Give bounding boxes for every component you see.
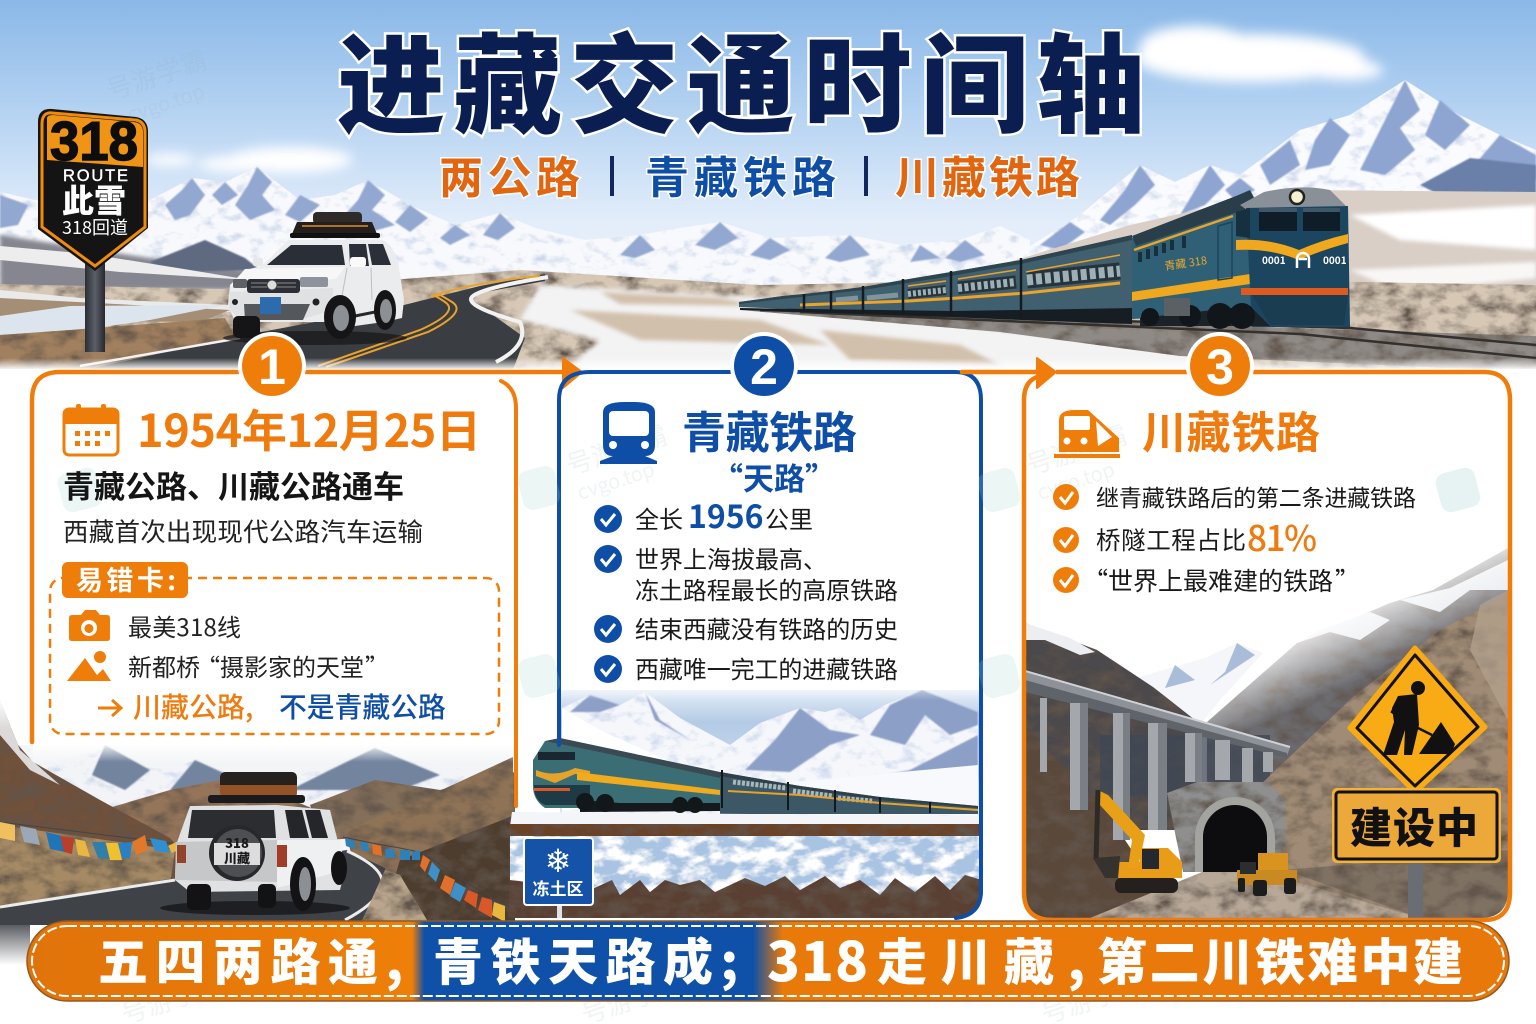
length fact: 公里 xyxy=(765,500,813,535)
bottom mnemonic banner xyxy=(27,918,1509,1001)
panel 2 content xyxy=(594,397,898,685)
callout tab xyxy=(62,562,188,598)
route label: ROUTE xyxy=(63,167,128,185)
subtitle part 3: 川藏铁路 xyxy=(895,142,1080,206)
banner phrase 4: 第二川铁难中建 xyxy=(1097,923,1463,995)
divider 1 xyxy=(610,156,614,196)
watermarks: 号游学霸 xyxy=(1021,415,1131,483)
scene: panel 3 construction xyxy=(1025,548,1508,922)
length fact: 1956 xyxy=(688,492,764,538)
check 1 xyxy=(1053,484,1079,510)
left mountain xyxy=(1025,623,1200,830)
right grey mountains xyxy=(1207,548,1508,790)
prayer flags left xyxy=(0,822,178,860)
callout tab text: 易错卡: xyxy=(76,559,176,598)
icon: train xyxy=(600,402,657,464)
right high snow range xyxy=(1000,80,1536,320)
permafrost sign xyxy=(524,836,593,920)
ballast and track xyxy=(740,310,1536,372)
tianlu label: “ xyxy=(712,454,743,499)
railway heading: 川藏铁路 xyxy=(1142,397,1320,461)
text: xinduqiao: 新都桥 xyxy=(128,648,200,683)
scene: panel 1 road xyxy=(0,698,515,925)
sign text: 冻土区 xyxy=(532,875,584,900)
train xyxy=(533,738,978,814)
white fade bottom left xyxy=(0,925,30,965)
road rear xyxy=(0,850,388,925)
railway heading: 青藏铁路 xyxy=(682,397,857,461)
spare tire sublabel: 川藏 xyxy=(224,848,250,867)
watermarks: cvgo.top xyxy=(1033,453,1118,506)
banner phrase 1: 五四两路通, xyxy=(98,923,403,995)
worker icon xyxy=(1383,681,1455,755)
check 2 xyxy=(594,545,622,573)
excavator xyxy=(1093,790,1182,893)
loco number plate right: 0001 xyxy=(1323,252,1347,267)
subtitle part 1: 两公路 xyxy=(439,142,580,206)
81 percent: 81% xyxy=(1247,511,1317,562)
panel 3 content xyxy=(1053,397,1416,598)
white fade into panels xyxy=(0,358,1536,370)
icon: calendar xyxy=(64,404,118,455)
divider 2 xyxy=(864,156,868,196)
check 3 xyxy=(594,615,622,643)
icon: camera xyxy=(69,610,110,641)
icon: bullet train xyxy=(1054,410,1120,458)
fade top of left strip xyxy=(0,700,10,724)
ground cross-section xyxy=(509,812,983,918)
loco side lettering: 青藏 318 xyxy=(1163,252,1208,274)
tunnel portal xyxy=(1167,782,1285,872)
passenger carriages xyxy=(739,235,1132,324)
check 2 xyxy=(1053,527,1079,553)
panel 2 white card xyxy=(557,372,981,918)
history fact: 结束西藏没有铁路的历史 xyxy=(635,610,898,645)
permafrost fact: 冻土路程最长的高原铁路 xyxy=(635,571,898,606)
bridge-tunnel fact: 桥隧工程占比 xyxy=(1096,522,1246,557)
callout: common mistake xyxy=(50,559,499,734)
loco emblem xyxy=(1297,253,1309,268)
step badge 3: 3 xyxy=(1206,339,1234,395)
banner phrase 2: 青铁天路成; xyxy=(433,923,738,995)
right tan slope xyxy=(1260,595,1508,918)
panel 2 border and arrow xyxy=(559,358,1056,918)
correction orange: 川藏公路, xyxy=(133,686,253,726)
check 1 xyxy=(594,505,622,533)
subtitle part 2: 青藏铁路 xyxy=(645,142,836,206)
hardest railway: ” xyxy=(1335,562,1360,598)
distant snowy peak xyxy=(1140,644,1262,721)
clouds xyxy=(145,26,1383,173)
hardest railway: “ xyxy=(1083,562,1108,598)
construction label: 建设中 xyxy=(1350,795,1478,856)
icon: mountains xyxy=(67,658,111,681)
white band above panels xyxy=(0,369,1536,375)
icon: location dot xyxy=(94,651,106,663)
altitude fact: 世界上海拔最高、 xyxy=(635,540,827,575)
tianlu label: ” xyxy=(805,454,836,499)
subtitle xyxy=(439,142,1080,206)
distant snow mountains xyxy=(38,753,464,851)
text: xinduqiao: “ xyxy=(196,648,220,683)
road xyxy=(75,274,548,372)
text: most beautiful 318: 最美318线 xyxy=(128,608,241,643)
check 3 xyxy=(1053,567,1079,593)
panel 3 white card xyxy=(1023,372,1510,920)
panel 1 content xyxy=(50,395,499,734)
step badge 1 xyxy=(238,332,306,400)
fade scene top xyxy=(561,690,979,698)
banner phrase 3 number: 318 xyxy=(767,918,868,997)
fade top of scene xyxy=(89,745,513,761)
scene: panel 2 frozen railway xyxy=(509,675,983,920)
step badge 1: 1 xyxy=(258,339,286,395)
bridge xyxy=(1025,671,1290,840)
rear SUV xyxy=(160,772,350,915)
hero SUV xyxy=(223,212,407,345)
watermarks: 号游学霸 xyxy=(561,415,671,483)
318 sub line: 318回道 xyxy=(62,214,128,240)
text: xinduqiao: ” xyxy=(365,648,389,683)
background: hero landscape xyxy=(0,0,1536,375)
loco number plate left: 0001 xyxy=(1262,252,1286,267)
road fade under left edge xyxy=(0,925,30,965)
second railway fact: 继青藏铁路后的第二条进藏铁路 xyxy=(1096,479,1416,513)
event heading: 青藏公路、川藏公路通车 xyxy=(63,462,404,507)
hardest railway: 世界上最难建的铁路 xyxy=(1108,562,1333,598)
watermarks: cvgo.top xyxy=(123,75,208,128)
left foreground slope xyxy=(1026,729,1151,918)
318 number: 318 xyxy=(50,110,138,172)
check 4 xyxy=(594,655,622,683)
panel 1 white card xyxy=(30,372,517,920)
panel 3 border xyxy=(1024,372,1510,920)
only completed fact: 西藏唯一完工的进藏铁路 xyxy=(635,650,898,685)
length fact: 全长 xyxy=(635,500,683,535)
plain and snowy ground xyxy=(0,270,1536,375)
step badge 2 xyxy=(730,332,798,400)
event description: 西藏首次出现现代公路汽车运输 xyxy=(63,512,423,549)
panel 1 border and arrow xyxy=(32,358,582,806)
correction blue: 不是青藏公路 xyxy=(279,686,446,726)
watermarks: 号游学霸 xyxy=(101,40,211,108)
arrow xyxy=(98,700,121,716)
sign chinese: 此雪 xyxy=(62,176,126,222)
prayer flags right xyxy=(343,837,510,922)
dump truck xyxy=(1237,853,1297,896)
snowflake glyph: ❄ xyxy=(545,836,571,882)
tianlu label: 天路 xyxy=(743,454,805,499)
text: xinduqiao: 摄影家的天堂 xyxy=(220,648,364,683)
valley shade xyxy=(1100,735,1270,795)
step badge 3 xyxy=(1186,332,1254,400)
worker sign xyxy=(1333,648,1500,922)
step badge 2: 2 xyxy=(750,339,778,395)
banner phrase 3: 走川藏, xyxy=(877,923,1085,995)
road sign 318 xyxy=(38,109,148,352)
watermarks: cvgo.top xyxy=(573,453,658,506)
date heading: 1954年12月25日 xyxy=(137,395,481,460)
snow mountains xyxy=(562,690,978,820)
dirt road xyxy=(1090,870,1420,918)
spare tire label: 318 xyxy=(225,833,249,852)
left and centre snow ranges xyxy=(0,167,1030,290)
title: 进藏交通时间轴 xyxy=(337,0,1145,156)
locomotive xyxy=(1132,187,1350,329)
